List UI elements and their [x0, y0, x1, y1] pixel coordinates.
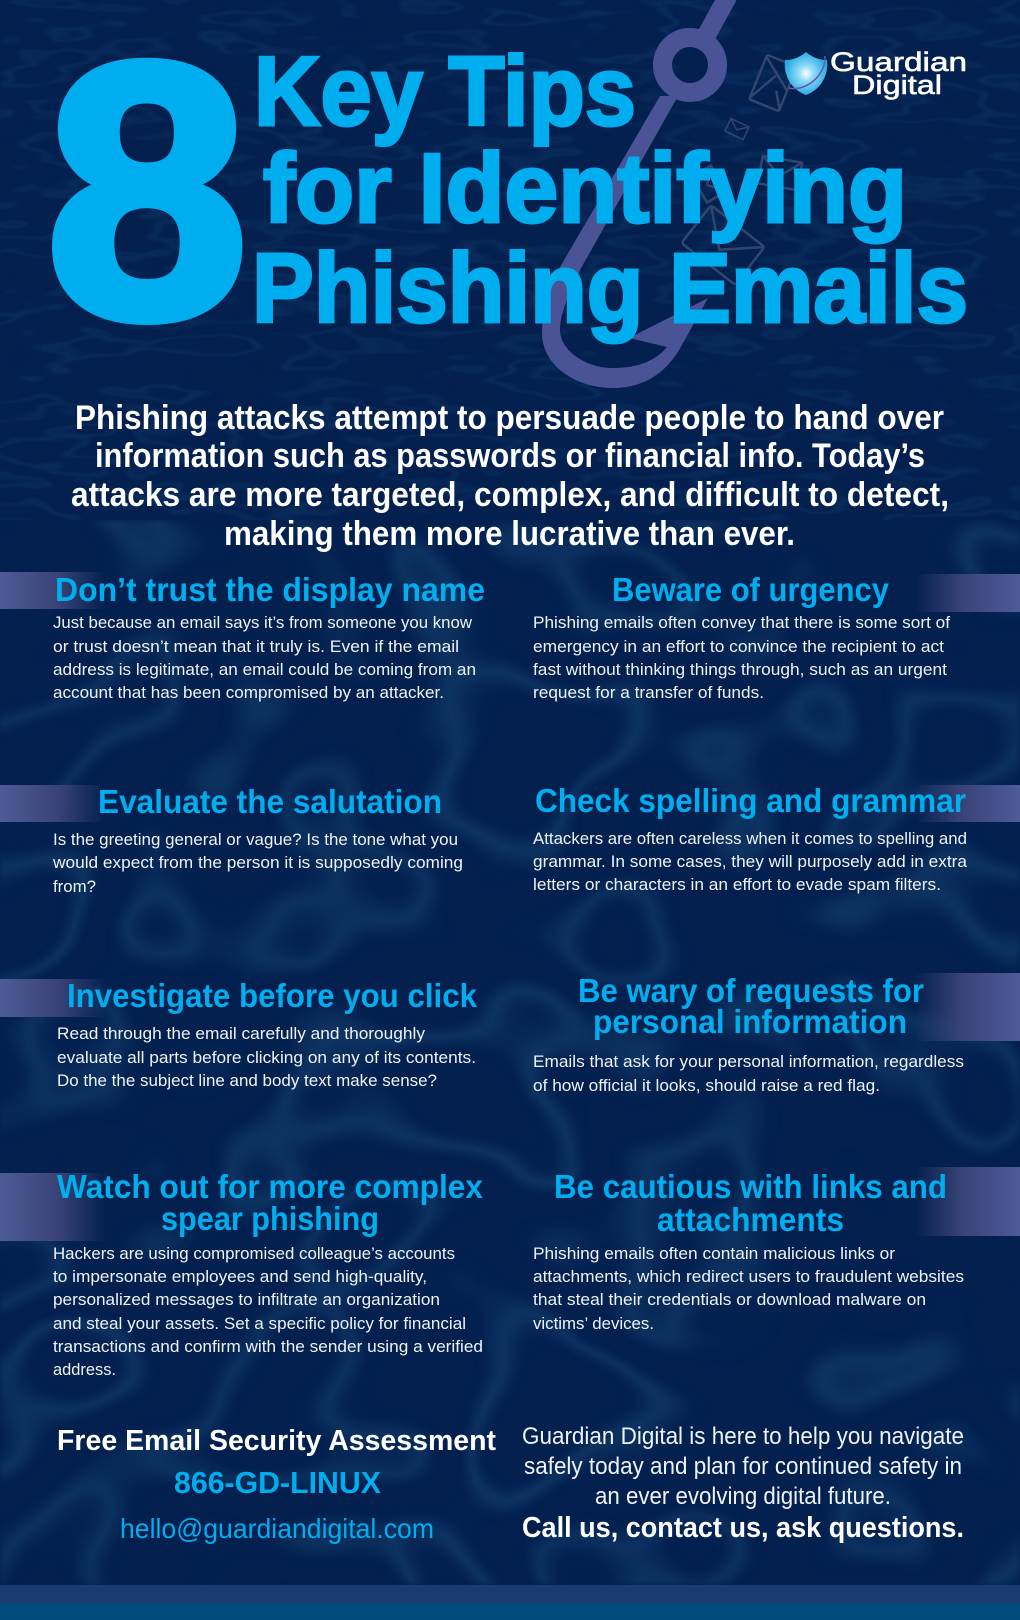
intro paragraph: Phishing attacks attempt to persuade people to hand over	[75, 399, 944, 437]
panel: spear phishing: Watch out for more complex	[57, 1168, 484, 1205]
panel: spelling and grammar: letters or characters in an effort to evade spam filters.	[533, 875, 941, 894]
panel: links and attachments: attachments	[657, 1201, 844, 1238]
panel: display name: address is legitimate, an email could be coming from an	[53, 660, 476, 679]
panel: links and attachments: that steal their credentials or download malware on	[533, 1290, 926, 1309]
panel: spelling and grammar	[533, 782, 1020, 894]
panel: personal information: of how official it looks, should raise a red flag.	[533, 1076, 880, 1095]
intro paragraph	[71, 399, 949, 553]
contact block: 866-GD-LINUX	[174, 1465, 381, 1500]
logo: Guardian Digital	[785, 47, 967, 100]
icon: fishing hook	[542, 0, 728, 388]
panel: investigate	[0, 977, 478, 1090]
footer bands	[0, 1585, 1020, 1620]
panel: spear phishing	[0, 1168, 484, 1379]
panel: display name	[0, 571, 485, 702]
panel: personal information: Be wary of requests for	[578, 972, 924, 1009]
logo text: Guardian	[830, 47, 967, 77]
panel: salutation: would expect from the person it is supposedly coming	[52, 853, 463, 872]
panel: personal information: Emails that ask for your personal information, regardless	[533, 1052, 964, 1071]
panel: display name: Just because an email says it’s from someone you know	[53, 613, 473, 632]
call to action text: Guardian Digital is here to help you navigate	[522, 1423, 964, 1450]
title: Key Tips for Identifying Phishing Emails	[252, 36, 968, 343]
panel: spear phishing: personalized messages to infiltrate an organization	[53, 1290, 440, 1309]
panel: personal information: personal information	[593, 1003, 907, 1040]
panel: personal information	[533, 972, 1020, 1095]
panel: salutation: Is the greeting general or vague? Is the tone what you	[53, 830, 458, 849]
title: big numeral 8: 8	[46, 0, 248, 393]
panel: links and attachments	[533, 1167, 1020, 1333]
panel: salutation: Evaluate the salutation	[98, 783, 442, 820]
panel: spelling and grammar: Check spelling and grammar	[535, 782, 966, 819]
panel: display name: Don’t trust the display name	[55, 571, 485, 608]
panel: links and attachments: victims’ devices.	[533, 1314, 654, 1333]
panel: links and attachments: Be cautious with links and	[554, 1168, 947, 1205]
panel: spelling and grammar: grammar. In some cases, they will purposely add in extra	[533, 852, 968, 871]
intro paragraph: attacks are more targeted, complex, and difficult to detect,	[71, 476, 949, 514]
panel: links and attachments: attachments, which redirect users to fraudulent websites	[533, 1267, 964, 1286]
call to action text: Call us, contact us, ask questions.	[522, 1512, 964, 1544]
intro paragraph: making them more lucrative than ever.	[224, 515, 795, 553]
logo text: Digital	[852, 70, 942, 100]
contact block: Free Email Security Assessment	[57, 1425, 496, 1457]
panel: urgency: emergency in an effort to convince the recipient to act	[533, 637, 944, 656]
panel: urgency: Beware of urgency	[612, 571, 890, 608]
panel: spelling and grammar: Attackers are often careless when it comes to spelling and	[533, 829, 967, 848]
icons: envelopes	[681, 55, 802, 285]
panel: spear phishing: and steal your assets. Set a specific policy for financial	[53, 1314, 466, 1333]
title: Key Tips for Identifying Phishing Emails: for Identifying	[263, 133, 907, 243]
panel: spear phishing: transactions and confirm with the sender using a verified	[53, 1337, 483, 1356]
panel: investigate: Do the the subject line and body text make sense?	[57, 1071, 437, 1090]
panel: display name: or trust doesn’t mean that it truly is. Even if the email	[53, 637, 459, 656]
call to action text	[522, 1423, 964, 1544]
title: Key Tips for Identifying Phishing Emails: Phishing Emails	[252, 233, 968, 343]
title: Key Tips for Identifying Phishing Emails: Key Tips	[254, 36, 636, 146]
panel: spear phishing: address.	[53, 1360, 116, 1379]
panel: display name: account that has been compromised by an attacker.	[53, 683, 444, 702]
icon: shield	[785, 52, 827, 95]
logo text	[830, 47, 967, 100]
panel: investigate: Investigate before you click	[67, 977, 478, 1014]
panel: urgency: fast without thinking things through, such as an urgent	[533, 660, 947, 679]
panel: links and attachments: Phishing emails often contain malicious links or	[533, 1244, 895, 1263]
panel: urgency	[533, 571, 1020, 702]
contact block: hello@guardiandigital.com	[120, 1513, 434, 1544]
panel: investigate: evaluate all parts before clicking on any of its contents.	[57, 1048, 476, 1067]
panel: spear phishing: spear phishing	[161, 1200, 379, 1237]
panel: urgency: request for a transfer of funds.	[533, 683, 764, 702]
panel: salutation	[0, 783, 463, 896]
panel: urgency: Phishing emails often convey that there is some sort of	[533, 613, 950, 632]
intro paragraph: information such as passwords or financial info. Today’s	[95, 437, 925, 475]
panel: investigate: Read through the email carefully and thoroughly	[57, 1024, 426, 1043]
contact block	[57, 1425, 496, 1544]
panel: spear phishing: Hackers are using compromised colleague’s accounts	[53, 1244, 455, 1263]
call to action text: safely today and plan for continued safety in	[524, 1453, 962, 1480]
panel: spear phishing: to impersonate employees and send high-quality,	[53, 1267, 427, 1286]
panel: salutation: from?	[53, 877, 96, 896]
call to action text: an ever evolving digital future.	[595, 1483, 891, 1510]
